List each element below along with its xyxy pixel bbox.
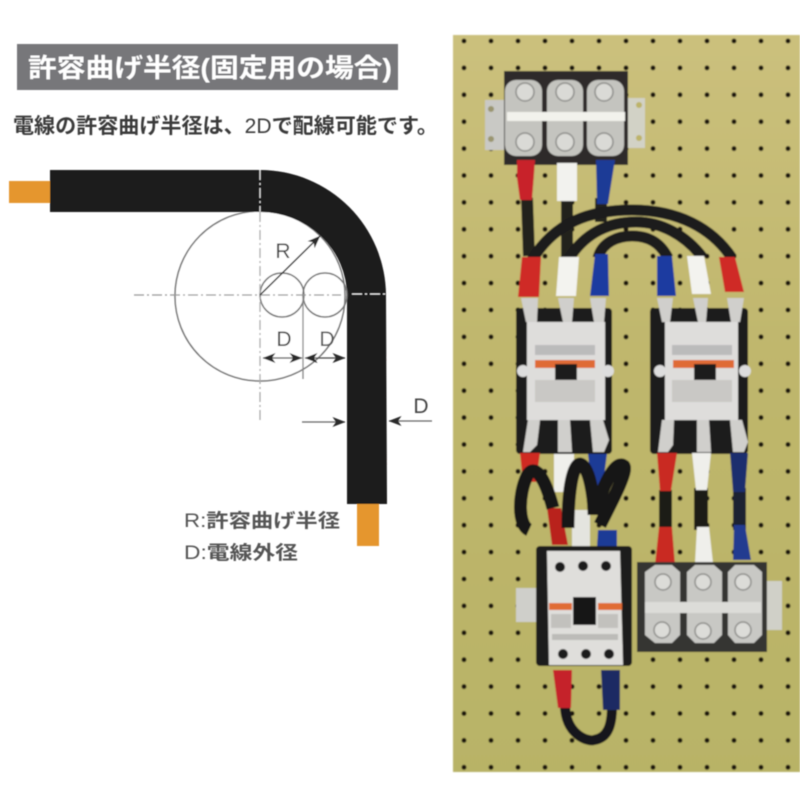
black bent wire [50,170,387,504]
arched jumper wires [532,210,732,260]
top block sleeves [517,160,615,204]
large bend radius circle [175,211,345,381]
R radius arrow [260,236,320,295]
legend D: D:電線外径 [184,542,298,564]
legend text [184,509,340,564]
arched wire sleeves [518,254,744,297]
D arrows inside circle [263,357,345,359]
subtitle text: 電線の許容曲げ半径は、2Dで配線可能です。 [13,115,438,138]
upper left contactor [516,308,614,454]
outer diameter arrow left [302,421,345,423]
D label left: D [276,328,292,351]
supply wires from top block [527,198,601,258]
D dimension divider [302,295,304,379]
right straight wires [655,453,751,565]
upper right contactor [650,308,751,454]
outer diameter arrow right [389,420,432,422]
legend R: R:許容曲げ半径 [184,509,340,532]
title banner [17,44,398,90]
title banner: 許容曲げ半径(固定用の場合) [28,53,392,83]
pegboard [453,35,800,772]
lower contactor [516,546,632,666]
top terminal block [485,71,645,165]
bottom U-shaped wire [553,670,620,740]
wire bending diagram [9,170,432,546]
small circles of wire diameter [260,273,347,317]
R label: R [275,240,291,263]
left lower sleeves and coiled wires [520,453,625,546]
orange conductor bottom [357,503,379,546]
pegboard photo with wired contactors [453,35,800,772]
contactor terminal lugs [521,298,748,452]
D label right: D [319,328,335,351]
D label outer: D [413,395,429,418]
center lines [134,170,386,420]
orange conductor left [9,181,51,203]
lower terminal block [637,562,782,652]
